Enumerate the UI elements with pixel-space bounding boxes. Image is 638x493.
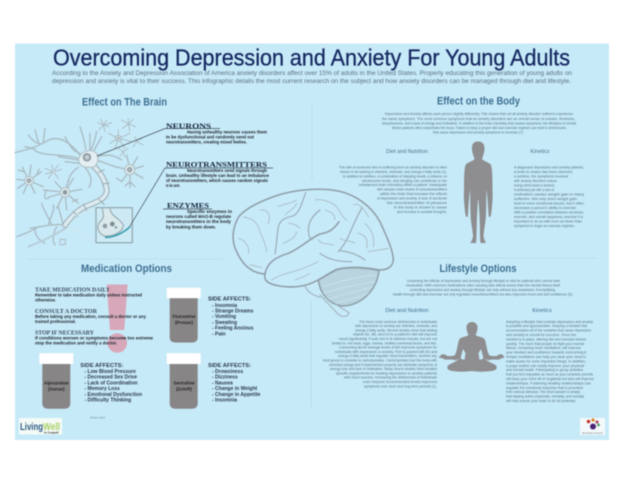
subheading: diet and nutrition (body): Diet and Nutrition [386,149,428,155]
callout: neurons: Having unhealthy neurons causes them [187,130,267,134]
side effects: alprazolam: - Lack of Coordination [84,380,138,386]
advice: consult a doctor: Before taking any medication, consult a doctor or any [35,314,147,319]
side effects: fluoxetine: SIDE AFFECTS: [208,296,251,302]
kinetics text (body) [514,164,584,228]
kinetics text (body): with anxiety disorders reduce [514,178,558,183]
kinetics text (body): sufferers. Not only does weight gain [514,196,577,201]
kinetics text (lifestyle): Simple meditation can help you clear your mind to [506,354,587,359]
callout: enzymes: neurons called MAO-B regulate [166,214,232,219]
callout: neurotransmitters: brain. Unhealthy lifestyle can lead to an imbalance [166,173,270,178]
advice: take medication daily: TAKE MEDICATION DAILY [35,288,111,294]
side effects: fluoxetine: - Feeling Anxious [212,326,254,332]
lifestyle intro text: health through diet and exercise not only regulates neurotransmitters but also improves mood and self confidence (5). [393,291,573,296]
kinetics text (lifestyle): mindset is in place, altering diet and exercise follows [506,336,586,341]
advice: take medication daily: otherwise. [35,298,56,302]
lifestyle intro text: Lessening the effects of depression and anxiety through lifestyle is vital for patients who cannot take [407,278,561,283]
diet text (lifestyle): specific supplements for treating depression or anxiety patients [336,370,437,375]
kinetics text (body): energy which leads to laziness. [514,182,555,188]
diet text (lifestyle): chemical energy and if implemented properly can eliminate symptoms of [329,362,438,367]
neuron axon [65,165,107,225]
heading: effect on the body: Effect on the Body [437,96,521,108]
advice: consult a doctor: CONSULT A DOCTOR [35,309,98,315]
callout: neurons: neurotransmitters, creating mixed feelies. [166,140,247,144]
body intro text: illness patients often exacerbate the issue. Failure to keep a proper diet and exercise regimen can lead to deficiencies [392,125,566,130]
diet text (lifestyle): symptoms over short and long term periods (1). [364,383,437,388]
diet text (body): shown to be lacking in vitamins, minerals, and omega-3 fatty acids (1). [340,169,447,174]
advice: consult a doctor: trained professional. [35,319,76,324]
lifestyle intro text: medication. With common medications often causing side effects worse than the mental illness itself [406,282,561,288]
kinetics text (body): a sublime, the symptoms involved [514,174,568,178]
kinetics text (lifestyle): make space for more important things. In addition, [506,358,586,363]
callout: neurons: NEURONS [166,122,211,130]
pill bottle: sertraline [167,353,201,409]
callout: neurotransmitters [166,160,270,188]
pill bottle: alprazolam: (Xanax) [48,386,65,391]
synapse inset box [65,208,132,243]
pill bottle: fluoxetine: Fluoxetine [173,314,196,319]
side effects: sertraline [208,363,261,404]
side effects: sertraline: - Dizziness [212,374,238,380]
callout: neurotransmitters: of neurotransmitters, which causes random signals [166,178,269,183]
kinetics text (lifestyle): that staying active physically, mentally, and socially [506,394,584,399]
kinetics text (body): decreases a person's ability to exercise. [514,205,577,210]
callout: neurotransmitters: to be sent. [166,183,180,188]
callout: neurons: to be dysfunctional and randomly send out [166,134,255,140]
diet text (lifestyle): energy loss and lack of motivation. Many recent studies have isolated [330,366,437,371]
diet text (lifestyle): mood significantly. Foods rich in B vitamins include, but are not [339,336,438,341]
kinetics text (lifestyle): Adopting a lifestyle that combats depression and anxiety [506,319,593,324]
diet text (lifestyle): omega-3 fatty acids that regulate mood transmitters. Another key [338,353,437,358]
diet text (body): and increase in suicidal thoughts. [397,209,447,214]
kinetics text (body): With a positive correlation between serotonin, [514,210,584,214]
kinetics text (body): a brain in chaos has been deemed, [514,169,573,174]
logo: living well [19,418,62,434]
body intro text: sleeplessness, and a lack of energy and motivation. In addition to the brain chemistry that causes symptoms, the lifestyles of mental [382,120,576,126]
callout: neurotransmitters: NEUROTRANSMITTERS [166,160,267,169]
side effects: fluoxetine: - Pain [212,331,226,337]
brain stem [305,286,349,316]
illustration: brain [233,189,393,316]
diet text (lifestyle): omega-3 fatty acids. Recent studies show that adding [355,327,437,332]
lifestyle intro text: controlling depression and anxiety through lifestyle can help without any drawbacks. Exemplifying [410,287,555,292]
logo: living well: Well [43,421,60,433]
side effects: alprazolam: - Emotional Dysfunction [84,392,142,398]
diet text (lifestyle): limited to: red meat, eggs, cheese, fortified cornbread beans, and fish. [332,340,437,345]
side effects: sertraline: - Change in Appetite [212,392,261,398]
kinetics text (body): exercise, and overall happiness, exercise it is [514,214,583,219]
side effects: fluoxetine: - Insomnia [212,303,237,309]
diet text (body): in the body is shown to cause [394,204,448,210]
title: Overcoming Depression and Anxiety For Young Adults [53,44,570,70]
callout: enzymes: by breaking them down. [166,224,216,230]
icon: meditation silhouette [438,322,504,372]
diet text (body): diet causes lower levels of neurotransmitters [377,186,447,192]
body intro text: Depression and Anxiety affects each person slightly differently. This means that not all anxiety disorder sufferers experience [385,111,574,116]
side effects: fluoxetine: - Strange Dreams [212,308,254,314]
diet text (lifestyle): with depression or anxiety are vitamins, minerals, and [355,323,437,328]
pill bottle: sertraline: (Zoloft) [176,386,192,391]
diet text (body): wholesome foods, and binging can contribute to the [362,178,448,183]
diet text (body): imbalanced brain chemistry within a patient. Inadequate [359,182,448,187]
callout: enzymes: neurotransmitters in the body [166,219,232,224]
body intro text: the same symptoms. The most common symptoms that an anxiety disorders are an overall sense of unease, tiredness, [382,116,575,121]
subheading: kinetics (body): Kinetics [531,149,550,155]
minor folds [238,200,388,280]
kinetics text (lifestyle): a yoga routine can easily improve your physical [506,363,584,368]
callout lines [97,128,273,226]
side effects: sertraline: - Change in Weight [212,386,258,392]
diet text (lifestyle): The three most common deficiencies in individuals [359,319,437,324]
diet text (body): within the brain that increase the effects [380,191,447,196]
kinetics text (lifestyle): and mental health. Participating in group activities [506,367,583,372]
pill bottle: fluoxetine [167,288,201,342]
callout: enzymes [166,201,232,230]
diet text (lifestyle): even beyond recommended levels improves [363,379,437,384]
kinetics text (body): symptoms to begin an exercise regimen. [514,223,575,228]
kinetics text (lifestyle): that you find enjoyable as much as your schedule permits [506,372,593,377]
kinetics text (body): A sedentary job with a lack of [514,187,555,192]
heading: lifestyle options: Lifestyle Options [440,263,516,275]
logo: living well: in Coppell [44,430,59,434]
side effects: fluoxetine: - Vomiting [212,314,236,320]
side effects: fluoxetine [208,296,254,337]
diet text (lifestyle): food group to consider is carbohydrates. Carbohydrates fuel the body with [323,358,437,362]
kinetics text (lifestyle): your mindset and confidence towards overcoming it. [506,350,587,355]
pill bottle: alprazolam [39,353,73,409]
neuron cell body [78,151,98,167]
subheading: diet and nutrition (lifestyle): Diet and Nutrition [385,308,429,314]
callout: neurotransmitters: Neurotransmitters send signals through [187,168,267,173]
pill bottle: alprazolam: Alprazolam [44,380,69,386]
side effects: sertraline: - Drowsiness [212,369,243,375]
diet text (lifestyle): with much success. Increasing the deficiencies of individuals [344,375,437,380]
side effects: alprazolam: SIDE AFFECTS: [80,363,124,369]
logo: mind body network [580,418,605,435]
works cited: Works Cited [90,416,105,420]
diet text (lifestyle) [323,319,438,388]
diet text (body) [339,164,448,214]
brain outline [233,189,393,287]
kinetics text (body): A diagnosed depression and anxiety patients, [514,164,584,170]
kinetics text (body): motivation causes weight gain in many [514,192,584,196]
callout: enzymes: ENZYMES [167,201,209,210]
logo: mind body network: Mind Body Network [582,432,604,435]
cerebellum [318,268,379,306]
kinetics text (body): lead to more emotional issues, but it often [514,200,584,206]
kinetics text (lifestyle): is possible and approachable. Keeping a mindset that [506,323,588,328]
heading: medication options: Medication Options [81,263,172,275]
side effects: alprazolam: - Decreased Sex Drive [84,374,137,380]
temporal fold [265,222,339,274]
kinetics text (lifestyle) [506,319,595,403]
kinetics text (lifestyle): accommodates all of the variables that cause depression [506,328,591,333]
icon: body silhouette [464,142,493,243]
side effects: alprazolam [80,363,142,404]
advice: stop if necessary: STOP IF NECESSARY [35,330,95,336]
callout: enzymes: Specific enzymes in [187,209,232,214]
diet text (lifestyle): Consuming above average levels of fish improves symptoms for [339,345,438,350]
advice: stop if necessary [35,330,154,346]
advice: consult a doctor [35,309,147,324]
main sulci [275,193,365,262]
logo: living well: Living [20,421,43,433]
kinetics text (lifestyle): quickly. The more that people do fight your mental [506,341,584,346]
illustration: neuron [15,118,143,247]
kinetics text (lifestyle): relationships. Fostering healthy relationships can [506,380,591,385]
diet text (body): In addition to nutrition, a combination of skipping meals, a reliance on [343,174,447,178]
kinetics text (lifestyle): will help ensure your brain to its full potential. [506,398,576,403]
kinetics text (lifestyle): regulate the emotional response that is provoked [506,385,583,390]
side effects: alprazolam: - Difficulty Thinking [84,398,131,404]
diet text (lifestyle): vitamin B1, B6, and D3 to a patient's diet will improve [353,332,438,337]
advice: stop if necessary: If conditions worsen or symptoms become too extreme [35,336,154,340]
subheading: kinetics (lifestyle): Kinetics [532,308,552,314]
intro text: depression and anxiety is vital to their success. This infographic details the most current research on the subject and how anxiety disorders can be managed through diet and lifestyle. [52,78,571,85]
diet text (body): The diet of someone who is suffering from an anxiety disorder is often [339,164,447,170]
kinetics text (lifestyle): illness, remaining more meditation, will improve [506,345,582,350]
side effects: sertraline: - Insomnia [212,398,237,404]
callout: neurons [166,122,267,144]
small neurons [115,155,143,187]
advice: take medication daily [35,288,142,302]
pill bottle: fluoxetine: (Prozac) [175,320,194,325]
kinetics text (lifestyle): from various stimulus. The short answer is simply [506,389,580,394]
advice: stop if necessary: stop the medication and notify a doctor. [35,340,117,346]
pill bottle: sertraline: Sertraline [173,380,195,386]
diet text (body): of depression and anxiety. A lack of serotonin [377,196,447,200]
side effects: alprazolam: - Low Blood Pressure [84,369,136,375]
kinetics text (lifestyle): and anxiety is crucial for success. Once the [506,332,577,337]
heading: effect on the brain: Effect on The Brain [82,96,167,108]
kinetics text (lifestyle): will keep your mind off of negativity but also will improve [506,376,595,381]
side effects: sertraline: SIDE AFFECTS: [208,363,251,369]
body intro text: that cause depression and anxiety symptoms to increase (7). [433,130,524,134]
lifestyle intro text [393,278,573,296]
intro text [52,70,573,85]
icon: exclamation mark [107,284,128,353]
side effects: fluoxetine: - Sweating [212,320,237,326]
kinetics text (body): important to do so with even as fewer than [514,218,582,224]
intro text: According to the Anxiety and Depression Association of America anxiety disorders affect over 15% of adults in the United States. Properly educating this generation of young adults on [52,70,573,77]
side effects: alprazolam: - Memory Loss [84,386,120,392]
diet text (body): the neurotransmitter of pleasure [387,200,448,205]
advice: take medication daily: Remember to take medication daily unless instructed [35,292,142,298]
body intro text [382,111,576,134]
diet text (lifestyle): individuals with depression or anxiety. Fish is packed with B3 and [335,349,437,354]
background panel [15,44,609,440]
side effects: sertraline: - Nausea [212,380,233,386]
